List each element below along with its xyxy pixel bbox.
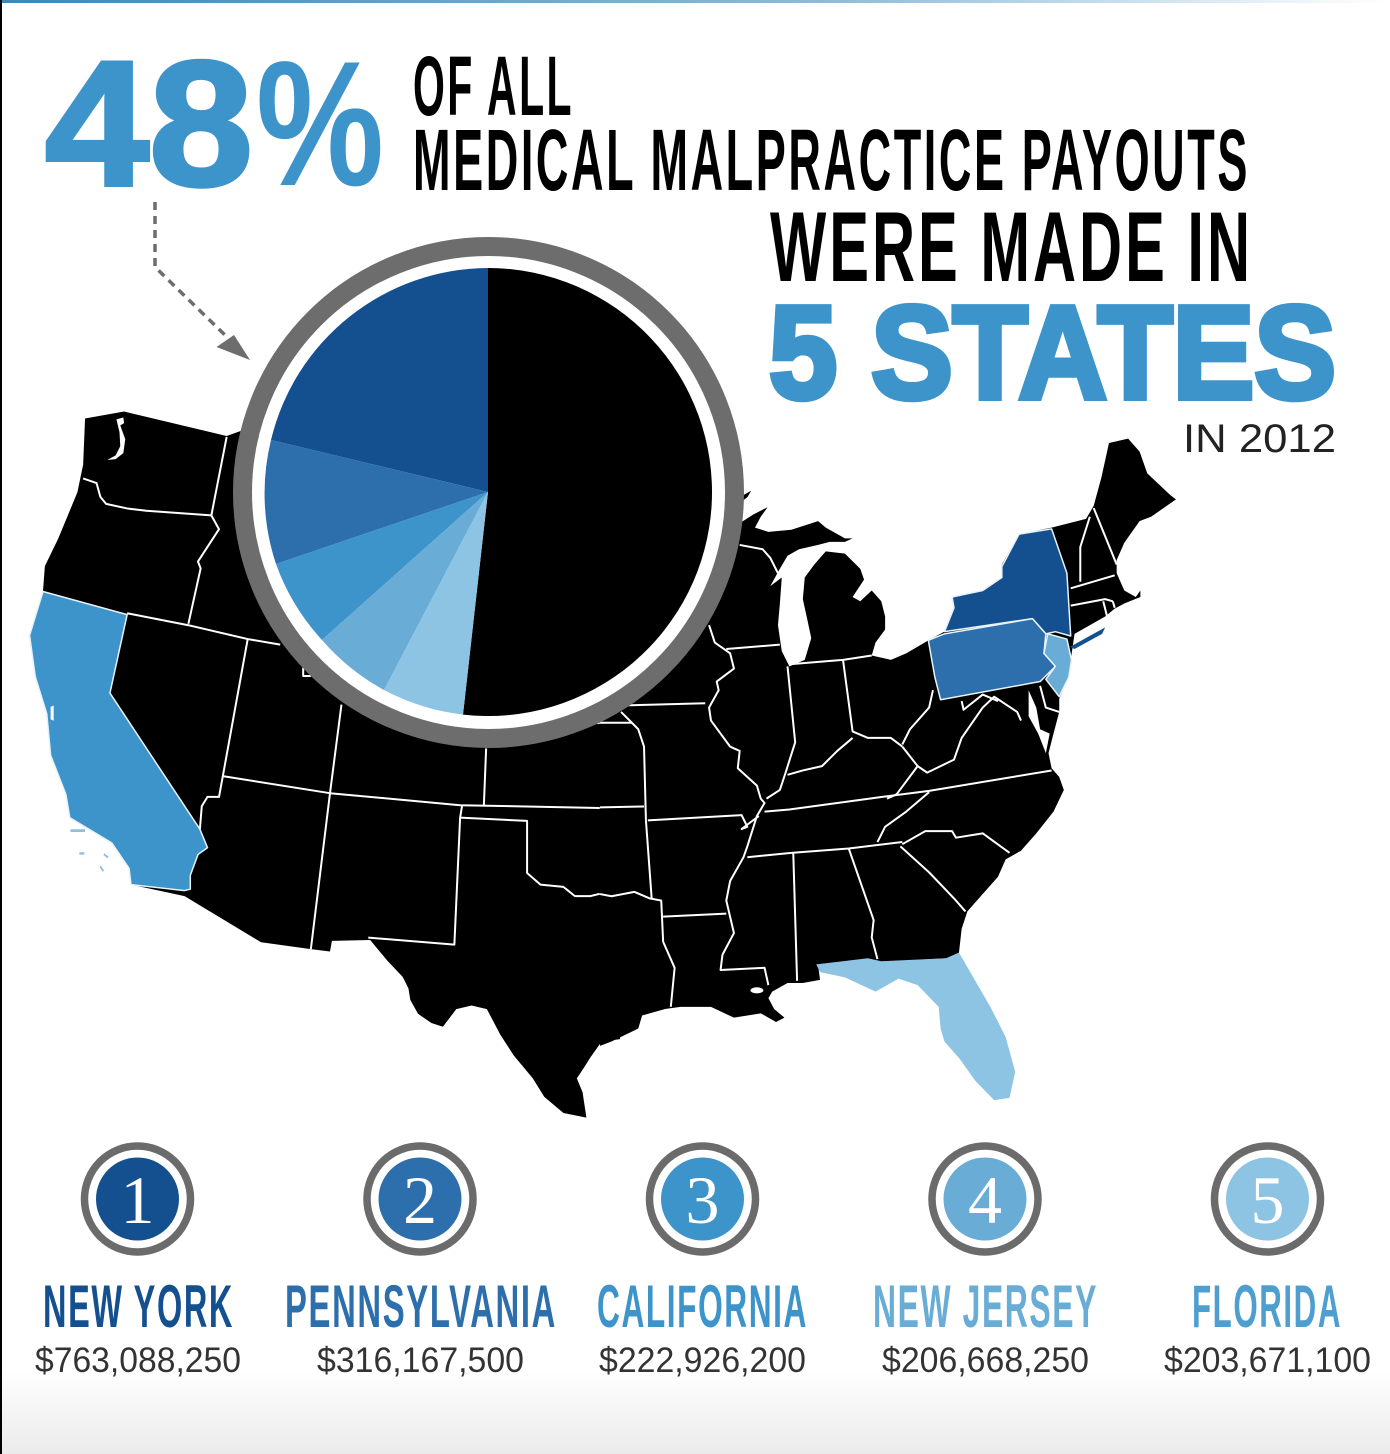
state: New York — [944, 529, 1105, 649]
slice: Florida — [384, 492, 488, 715]
state name: PENNSYLVANIA — [285, 1273, 557, 1340]
badge 2: 2 — [403, 1162, 437, 1238]
slice: New York — [271, 268, 488, 492]
rank 1: New York — [35, 1146, 241, 1380]
headline statistic: 48%: 48 — [45, 24, 253, 223]
slice: Pennsylvania — [265, 440, 488, 564]
state: California — [30, 592, 208, 891]
badge 3: 3 — [686, 1162, 720, 1238]
state name: NEW YORK — [43, 1273, 234, 1340]
amount: $203,671,100 — [1164, 1341, 1371, 1380]
badge 1 — [84, 1146, 190, 1252]
headline statistic: 48%: % — [256, 24, 384, 223]
state: Florida — [816, 953, 1015, 1100]
badge 5: 5 — [1250, 1162, 1284, 1238]
rank 3: California — [597, 1146, 808, 1380]
state name: CALIFORNIA — [597, 1273, 808, 1340]
slice: California — [276, 492, 488, 640]
badge 4: 4 — [968, 1162, 1002, 1238]
rank 2: Pennsylvania — [285, 1146, 557, 1380]
badge 1: 1 — [120, 1162, 154, 1238]
arrow: from 48% to pie chart — [155, 202, 250, 360]
eastern states — [600, 430, 1176, 1100]
pie chart in ring — [242, 246, 734, 738]
state: New Jersey — [1044, 634, 1071, 697]
amount: $316,167,500 — [317, 1341, 524, 1380]
rank 5: Florida — [1164, 1146, 1371, 1380]
US map — [30, 400, 1176, 1118]
text: OF ALL — [413, 39, 574, 133]
badge 5 — [1214, 1146, 1320, 1252]
western states — [30, 400, 620, 1118]
badge 2 — [367, 1146, 473, 1252]
amount: $206,668,250 — [882, 1341, 1089, 1380]
caption: in 2012: IN 2012 — [1183, 417, 1336, 461]
state name: NEW JERSEY — [873, 1273, 1098, 1340]
slice: remaining states — [463, 268, 712, 716]
badge 4 — [932, 1146, 1038, 1252]
badge 3 — [650, 1146, 756, 1252]
rank 4: New Jersey — [873, 1146, 1098, 1380]
amount: $763,088,250 — [35, 1341, 241, 1380]
slice: New Jersey — [322, 492, 488, 690]
state: Pennsylvania — [928, 619, 1055, 700]
amount: $222,926,200 — [599, 1341, 806, 1380]
heading: 5 states: 5 STATES — [769, 279, 1336, 426]
